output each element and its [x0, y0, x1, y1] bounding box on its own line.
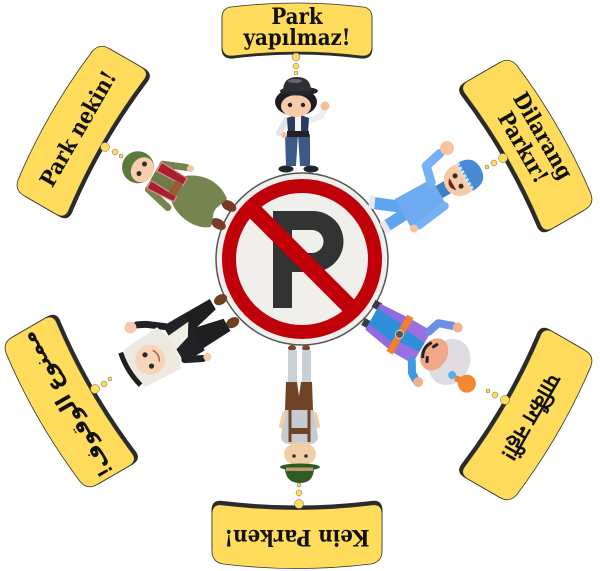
character: German man in lederhosen: [280, 345, 320, 483]
speech bubble: Indonesian: [457, 54, 600, 235]
thought dots: top: [292, 53, 300, 75]
bubble text: Park nekin!: [35, 66, 122, 192]
bubble text: Park: [271, 4, 324, 30]
character: Malay boy in olive: [113, 135, 244, 239]
bubble text: ممنوع الوقوف!: [15, 327, 119, 481]
speech bubble: Turkish: [222, 3, 372, 58]
speech bubble: Malay: [9, 40, 152, 221]
no parking sign: [216, 173, 388, 345]
thought dots: upper left: [100, 142, 123, 158]
thought dots: bottom: [294, 483, 304, 508]
speech bubble: Hindi: [457, 325, 600, 506]
bubble text: Kein Parken!: [224, 524, 370, 550]
bubble text: yapılmaz!: [243, 25, 350, 51]
thought dots: lower right: [486, 389, 510, 404]
letter P: [273, 211, 344, 308]
bubble text: Dilarang: [507, 88, 578, 184]
thought dots: upper right: [485, 154, 508, 169]
speech bubble: German: [212, 501, 382, 568]
character: Indian man with turban: [348, 281, 499, 412]
character: Turkish boy: [275, 77, 330, 172]
bubble text: पार्किंग नहीं!: [496, 368, 567, 466]
character: Arab man in black: [107, 273, 250, 398]
bubble text: Parkır!: [492, 107, 553, 188]
speech bubble: Arabic: [0, 312, 140, 493]
thought dots: lower left: [90, 377, 112, 394]
prohibition bar: [252, 209, 352, 309]
character: Indonesian boy in blue: [358, 133, 492, 247]
